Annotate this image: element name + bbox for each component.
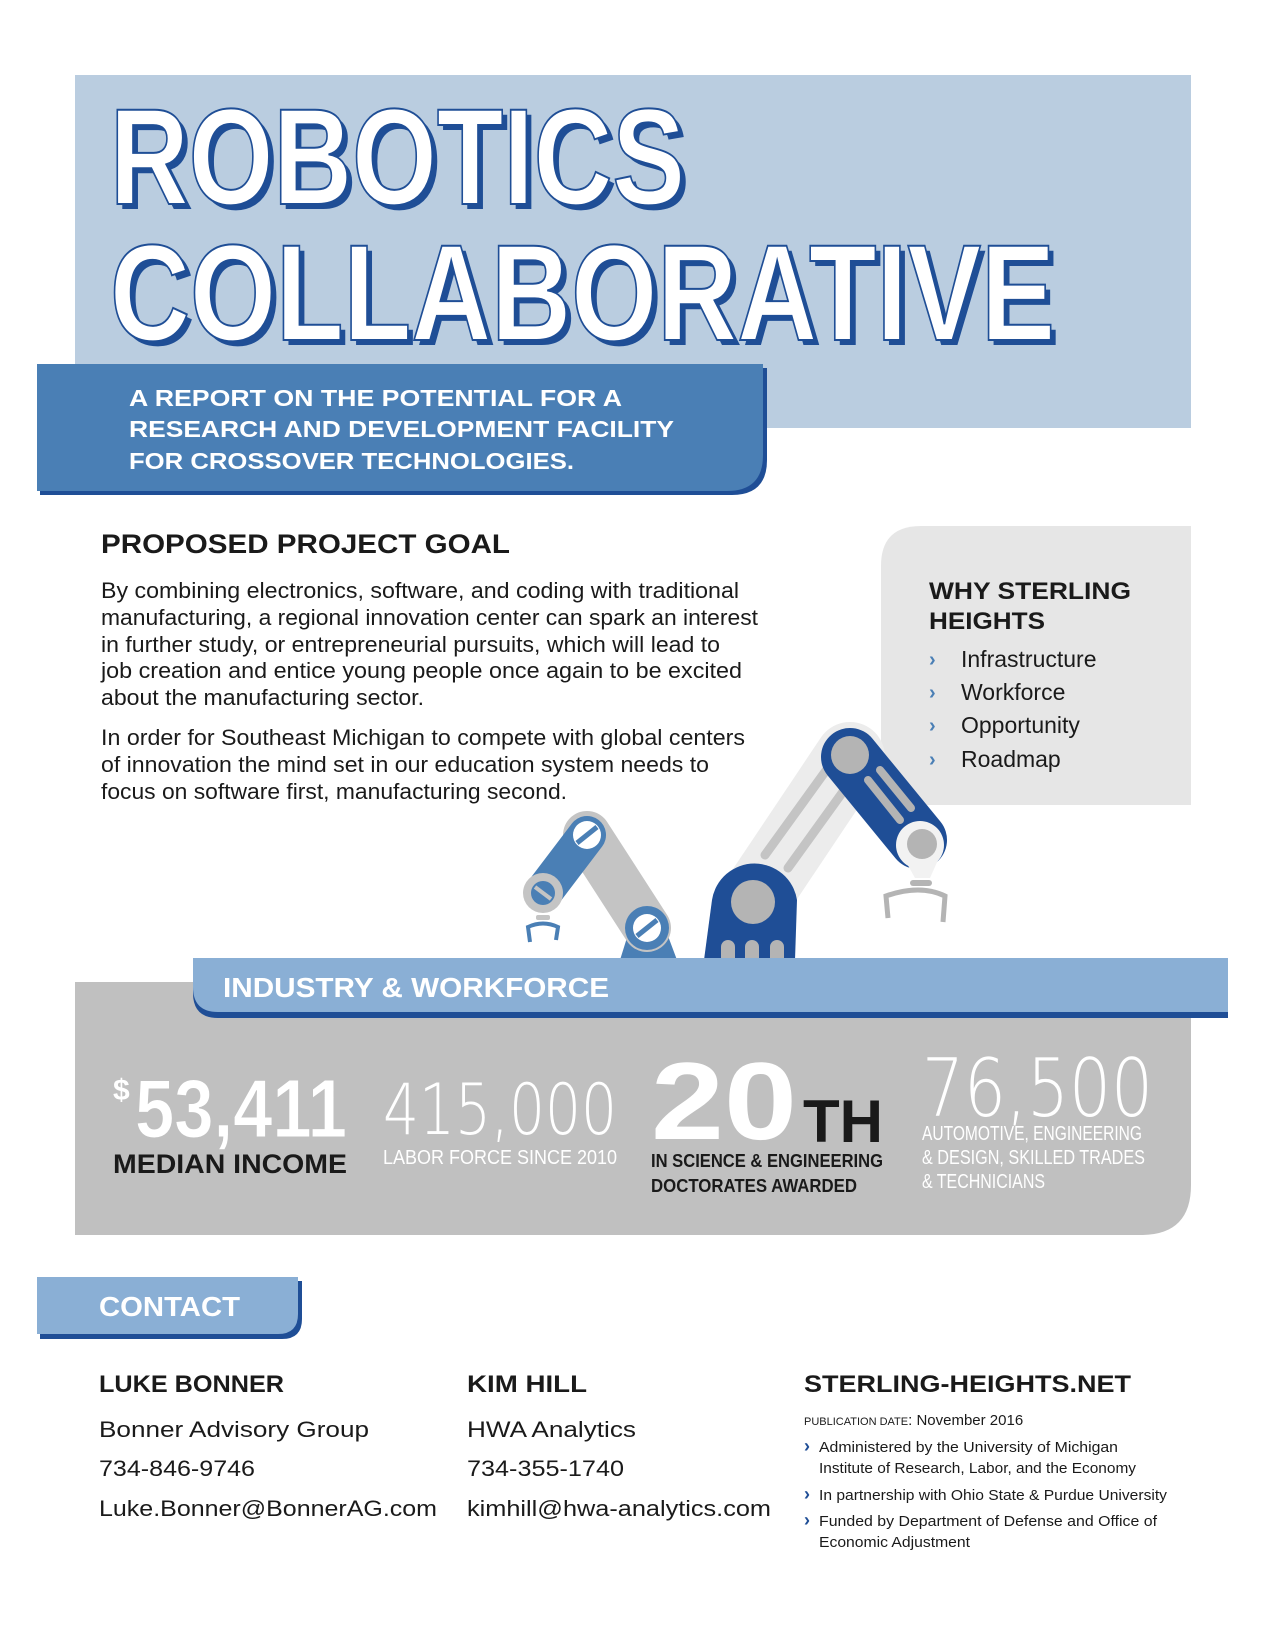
panel: why sterling heights: HEIGHTS (929, 608, 1045, 635)
stat: 76,500 trades (922, 1042, 1153, 1193)
publication info (804, 1371, 1168, 1551)
publication info: STERLING-HEIGHTS.NET (804, 1371, 1131, 1398)
stat: labor force: 415,000 (383, 1069, 617, 1151)
contact: luke bonner: Luke.Bonner@BonnerAG.com (99, 1496, 437, 1521)
title: COLLABORATIVE (115, 222, 1060, 375)
publication info: Institute of Research, Labor, and the Economy (819, 1460, 1137, 1477)
panel: why sterling heights: › (929, 715, 936, 737)
text block: goal paragraphs: By combining electronics, software, and coding with traditional (101, 578, 739, 603)
contact tab (37, 1277, 302, 1339)
publication info: In partnership with Ohio State & Purdue University (819, 1487, 1168, 1504)
text block: goal paragraphs: in further study, or entrepreneurial pursuits, which will lead to (101, 632, 720, 657)
panel: why sterling heights: Roadmap (961, 746, 1061, 772)
contact: luke bonner: Bonner Advisory Group (99, 1417, 369, 1442)
panel: industry & workforce stats background (75, 982, 1191, 1235)
contact: kim hill: 734-355-1740 (467, 1456, 624, 1481)
contact: luke bonner: 734-846-9746 (99, 1456, 255, 1481)
contact: luke bonner (99, 1371, 437, 1521)
subtitle banner: FOR CROSSOVER TECHNOLOGIES. (129, 448, 574, 474)
publication info: Administered by the University of Michigan (819, 1439, 1118, 1456)
panel: why sterling heights (881, 526, 1191, 805)
publication info: › (804, 1510, 810, 1530)
stat: 76,500 trades: & DESIGN, SKILLED TRADES (922, 1147, 1145, 1169)
stat: median income: $ (113, 1074, 130, 1107)
text block: goal paragraphs: about the manufacturing sector. (101, 685, 424, 710)
contact: luke bonner: LUKE BONNER (99, 1371, 284, 1398)
contact: kim hill (467, 1371, 771, 1521)
contact: kim hill: KIM HILL (467, 1371, 587, 1398)
subtitle banner: RESEARCH AND DEVELOPMENT FACILITY (129, 416, 674, 442)
panel: why sterling heights: › (929, 749, 936, 771)
title: ROBOTICS (115, 86, 690, 239)
panel: why sterling heights: Infrastructure (961, 646, 1096, 672)
heading bar: industry & workforce (193, 958, 1228, 1018)
publication info: › (804, 1436, 810, 1456)
header panel (75, 75, 1191, 428)
publication info: Funded by Department of Defense and Office of (819, 1513, 1158, 1530)
stat: median income (113, 1062, 347, 1179)
text block: goal paragraphs: of innovation the mind set in our education system needs to (101, 752, 709, 777)
contact tab: CONTACT (99, 1291, 240, 1322)
panel: why sterling heights: Opportunity (961, 712, 1080, 738)
contact: kim hill: kimhill@hwa-analytics.com (467, 1496, 771, 1521)
subtitle banner (37, 364, 767, 495)
publication info: › (804, 1484, 810, 1504)
publication info: PUBLICATION DATE: November 2016 (804, 1412, 1023, 1429)
heading bar: industry & workforce: INDUSTRY & WORKFORCE (223, 972, 609, 1003)
title: COLLABORATIVE (110, 217, 1055, 370)
stat: median income: MEDIAN INCOME (113, 1149, 347, 1179)
text block: goal paragraphs: In order for Southeast Michigan to compete with global centers (101, 725, 745, 750)
subtitle banner: A REPORT ON THE POTENTIAL FOR A (129, 385, 622, 411)
publication info: Economic Adjustment (819, 1534, 971, 1551)
stat: 76,500 trades: & TECHNICIANS (922, 1171, 1045, 1193)
stat: 20th doctorates: 20 (651, 1040, 797, 1163)
panel: why sterling heights: WHY STERLING (929, 578, 1131, 605)
heading: proposed project goal: PROPOSED PROJECT GOAL (101, 529, 510, 559)
panel: why sterling heights: › (929, 649, 936, 671)
stat: 20th doctorates (651, 1040, 883, 1196)
text block: goal paragraphs: focus on software first, manufacturing second. (101, 779, 567, 804)
panel: why sterling heights: Workforce (961, 679, 1065, 705)
stat: labor force (383, 1069, 617, 1169)
title (110, 81, 1060, 375)
stat: 20th doctorates: DOCTORATES AWARDED (651, 1176, 857, 1196)
stat: 20th doctorates: TH (803, 1088, 883, 1155)
illustration: robot arms (523, 736, 945, 965)
panel: why sterling heights: › (929, 682, 936, 704)
text block: goal paragraphs (100, 578, 758, 804)
stat: labor force: LABOR FORCE SINCE 2010 (383, 1147, 617, 1169)
stat: 76,500 trades: 76,500 (922, 1042, 1153, 1135)
text block: goal paragraphs: manufacturing, a regional innovation center can spark an interest (101, 605, 758, 630)
stat: median income: 53,411 (135, 1062, 347, 1155)
stat: 20th doctorates: IN SCIENCE & ENGINEERING (651, 1151, 883, 1171)
stat: 76,500 trades: AUTOMOTIVE, ENGINEERING (922, 1123, 1142, 1145)
contact: kim hill: HWA Analytics (467, 1417, 636, 1442)
title: ROBOTICS (110, 81, 685, 234)
text block: goal paragraphs: job creation and entice young people once again to be excited (100, 658, 742, 683)
